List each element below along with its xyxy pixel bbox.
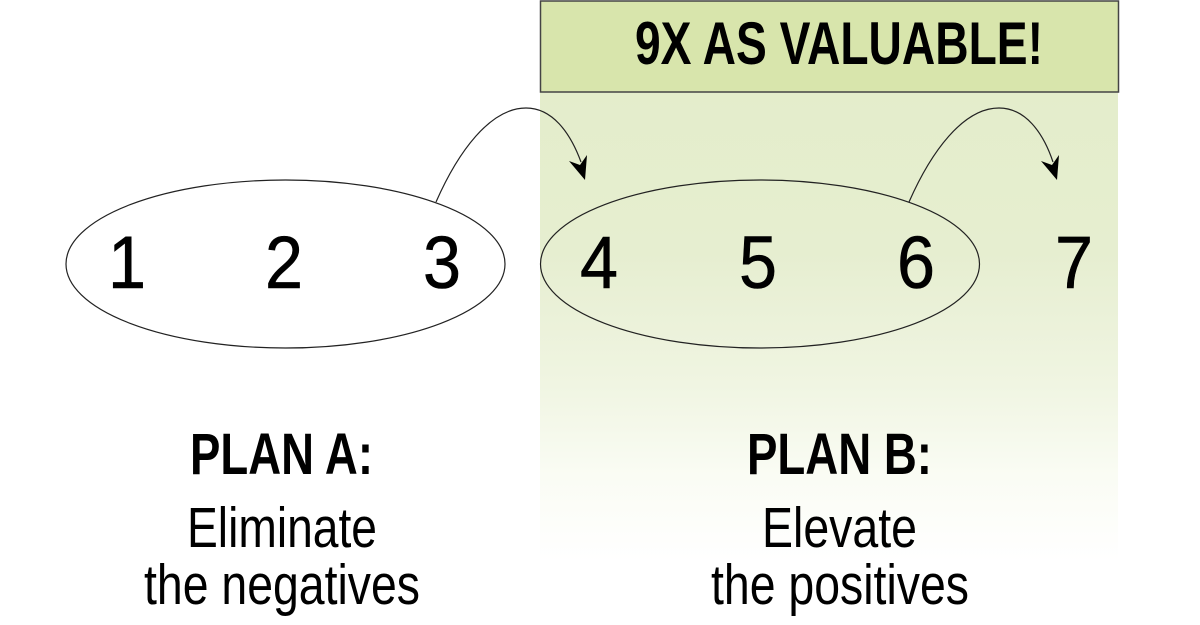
panel: green gradient background bbox=[540, 92, 1118, 625]
text: Elevate the positives: Elevate bbox=[762, 496, 917, 560]
numbers 1 to 7 bbox=[108, 221, 1093, 304]
numbers 1 to 7: 3 bbox=[423, 221, 461, 304]
numbers 1 to 7: 5 bbox=[739, 221, 777, 304]
numbers 1 to 7: 4 bbox=[580, 221, 618, 304]
ellipse: Plan B group bbox=[540, 180, 980, 348]
arrow: from 3 to 4 bbox=[436, 108, 587, 202]
arrow: from 6 to 7 bbox=[909, 108, 1059, 202]
text: Eliminate the negatives: the negatives bbox=[144, 553, 420, 617]
numbers 1 to 7: 2 bbox=[265, 221, 303, 304]
numbers 1 to 7: 6 bbox=[897, 221, 935, 304]
banner: 9X as valuable bbox=[540, 1, 1118, 92]
heading: Plan B: PLAN B: bbox=[747, 422, 932, 487]
text: Elevate the positives: the positives bbox=[711, 553, 969, 617]
numbers 1 to 7: 1 bbox=[108, 221, 146, 304]
text: Eliminate the negatives bbox=[144, 496, 420, 617]
ellipse: Plan A group bbox=[66, 180, 505, 348]
banner: 9X as valuable: 9X AS VALUABLE! bbox=[635, 10, 1043, 77]
text: Elevate the positives bbox=[711, 496, 969, 617]
numbers 1 to 7: 7 bbox=[1055, 221, 1093, 304]
heading: Plan A: PLAN A: bbox=[190, 422, 373, 487]
text: Eliminate the negatives: Eliminate bbox=[187, 496, 377, 560]
